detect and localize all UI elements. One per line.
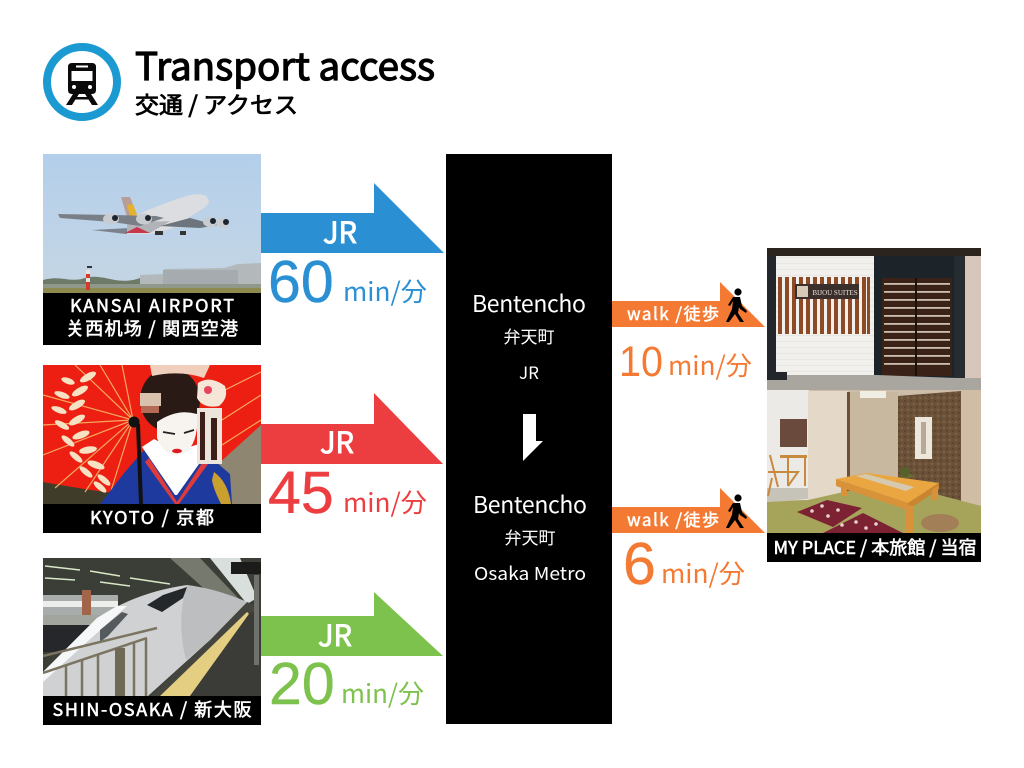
station: Bentencho Osaka Metro: 弁天町 xyxy=(504,524,556,549)
photo: house exterior: BIJOU SUITES xyxy=(812,289,858,297)
station: Bentencho Osaka Metro: Bentencho xyxy=(473,486,587,520)
time: 20 min: min/分 xyxy=(341,674,424,711)
time: 45 min: min/分 xyxy=(343,483,427,520)
time: 10 min: min/分 xyxy=(668,346,752,383)
caption CJK: 关西机场 / 関西空港 xyxy=(66,315,238,341)
caption: SHIN-OSAKA / 新大阪 xyxy=(52,696,252,722)
title: Transport access xyxy=(135,36,435,91)
time: 60 min xyxy=(268,249,427,315)
time: 45 min: 45 xyxy=(268,460,334,526)
arrow: JR from Kyoto: JR xyxy=(320,420,354,462)
station: Bentencho Osaka Metro: Osaka Metro xyxy=(474,560,586,586)
caption: KANSAI AIRPORT xyxy=(70,292,234,318)
time: 6 min: 6 xyxy=(623,531,656,597)
arrow: JR from Kansai Airport: JR xyxy=(323,210,357,252)
arrow: walk 10 min: walk /徒歩 xyxy=(627,300,719,325)
time: 10 min xyxy=(619,338,752,386)
photo: maiko with red parasol xyxy=(43,365,261,504)
station: Bentencho JR xyxy=(472,285,586,384)
photo: airplane taking off xyxy=(43,154,261,293)
icon: train in circle xyxy=(47,47,117,117)
arrow: JR from Shin-Osaka xyxy=(261,592,443,656)
photo: house exterior xyxy=(767,248,981,390)
time: 20 min: 20 xyxy=(269,651,335,717)
time: 6 min: min/分 xyxy=(661,554,745,591)
time: 20 min xyxy=(269,651,424,717)
panel: Bentencho transfer xyxy=(446,154,612,724)
arrow: JR from Kansai Airport xyxy=(261,183,444,253)
station: Bentencho JR: JR xyxy=(519,359,539,384)
time: 6 min xyxy=(623,531,745,597)
icon: walking person xyxy=(726,494,747,528)
photo: shinkansen at platform xyxy=(43,558,261,696)
arrow: walk 6 min xyxy=(612,488,765,533)
arrow: JR from Kyoto xyxy=(261,393,443,464)
station: Bentencho JR: Bentencho xyxy=(472,285,586,319)
arrow: JR from Shin-Osaka: JR xyxy=(318,613,352,655)
station: Bentencho JR: 弁天町 xyxy=(504,323,554,348)
time: 45 min xyxy=(268,460,427,526)
station: Bentencho Osaka Metro xyxy=(473,486,587,586)
icon: walking person xyxy=(726,288,747,322)
panel: Kyoto xyxy=(43,365,261,533)
arrow: walk 10 min xyxy=(612,282,765,327)
time: 60 min: 60 xyxy=(268,249,334,315)
panel: Shin-Osaka xyxy=(43,558,261,725)
time: 10 min: 10 xyxy=(619,338,663,386)
time: 60 min: min/分 xyxy=(343,272,427,309)
caption: MY PLACE / 本旅館 / 当宿 xyxy=(774,534,976,560)
caption: KYOTO / 京都 xyxy=(90,504,214,530)
subtitle: 交通 / アクセス xyxy=(135,86,298,120)
panel: Kansai Airport xyxy=(43,154,261,345)
panel: My Place xyxy=(767,248,981,562)
arrow: transfer down xyxy=(523,414,543,461)
arrow: walk 6 min: walk /徒歩 xyxy=(627,506,719,531)
photo: Japanese-style room xyxy=(767,390,981,533)
